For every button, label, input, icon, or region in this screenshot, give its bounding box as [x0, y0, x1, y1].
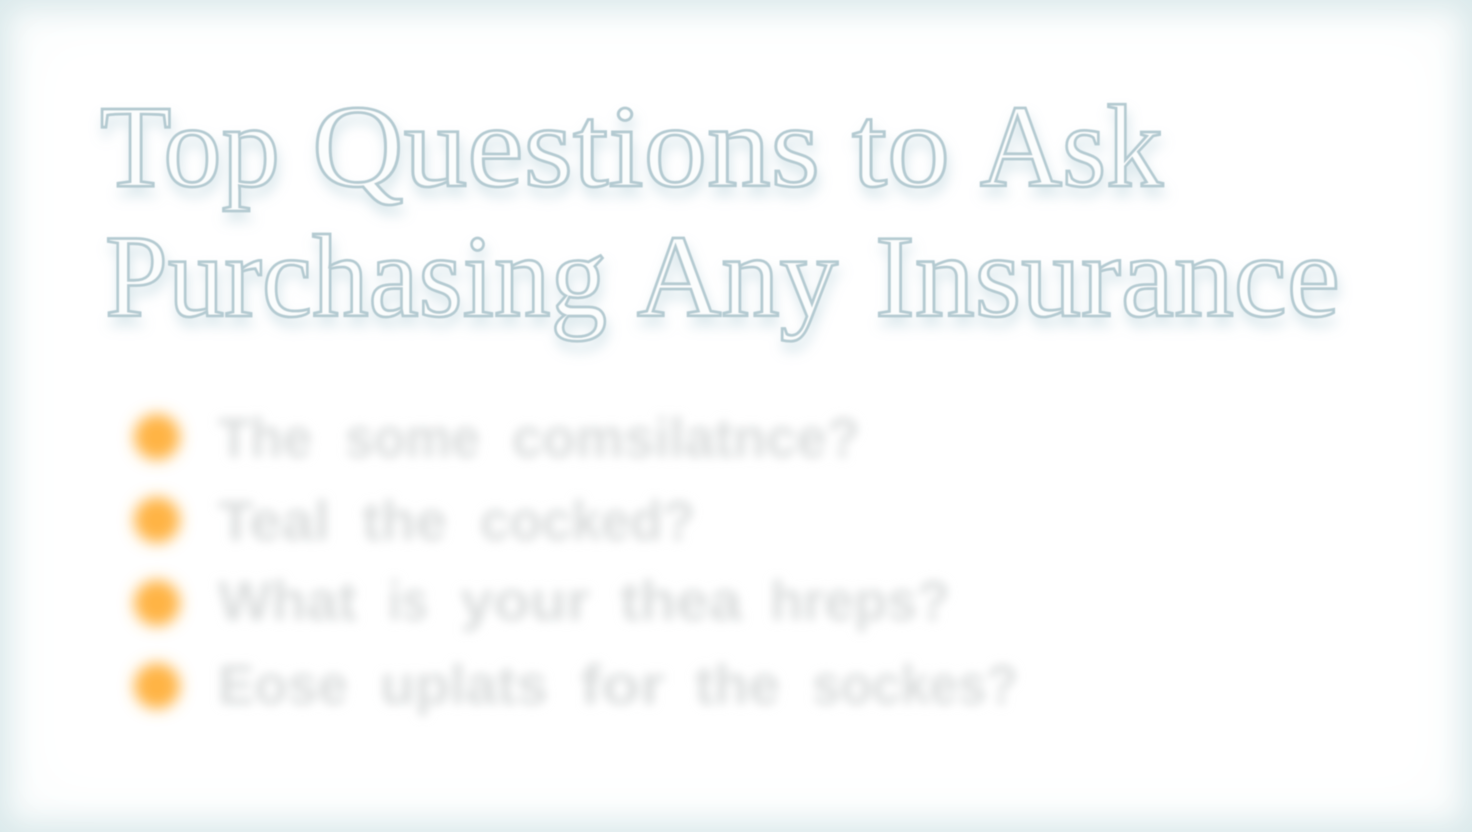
title line 1: to [852, 81, 950, 212]
bullet item 3: What [218, 569, 357, 632]
title line 1: Questions [312, 81, 820, 212]
bullet item 4: uplats [380, 653, 548, 716]
bullet item 4: sockes? [812, 653, 1018, 716]
title line 1 [100, 81, 1163, 212]
title line 2: Insurance [875, 211, 1340, 342]
bullet item 1: The [218, 406, 312, 469]
title line 2: Any [637, 211, 838, 342]
bullet item 4: Eose [218, 653, 348, 716]
bullet item 2: Teal [218, 489, 330, 552]
bullet item 4: for [580, 653, 665, 716]
bullet list [134, 406, 1018, 716]
title line 1: Ask [980, 81, 1163, 212]
bullet item 2 [134, 489, 695, 552]
bullet item 3: hreps? [770, 569, 950, 632]
bullet item 2: cocked? [480, 489, 695, 552]
title line 2 [105, 211, 1340, 342]
bullet item 1: some [345, 406, 480, 469]
bullet item 1: comsilatnce? [512, 406, 860, 469]
bullet item 1 [134, 406, 860, 469]
bullet item 4: the [695, 653, 780, 716]
bullet item 3 [134, 569, 950, 632]
bullet item 3: thea [620, 569, 743, 632]
bullet item 3: your [460, 569, 590, 632]
title line 1: Top [100, 81, 280, 212]
title line 2: Purchasing [105, 211, 607, 342]
bullet item 2: the [362, 489, 447, 552]
title [100, 81, 1340, 342]
bullet item 3: is [388, 569, 428, 632]
bullet item 4 [134, 653, 1018, 716]
